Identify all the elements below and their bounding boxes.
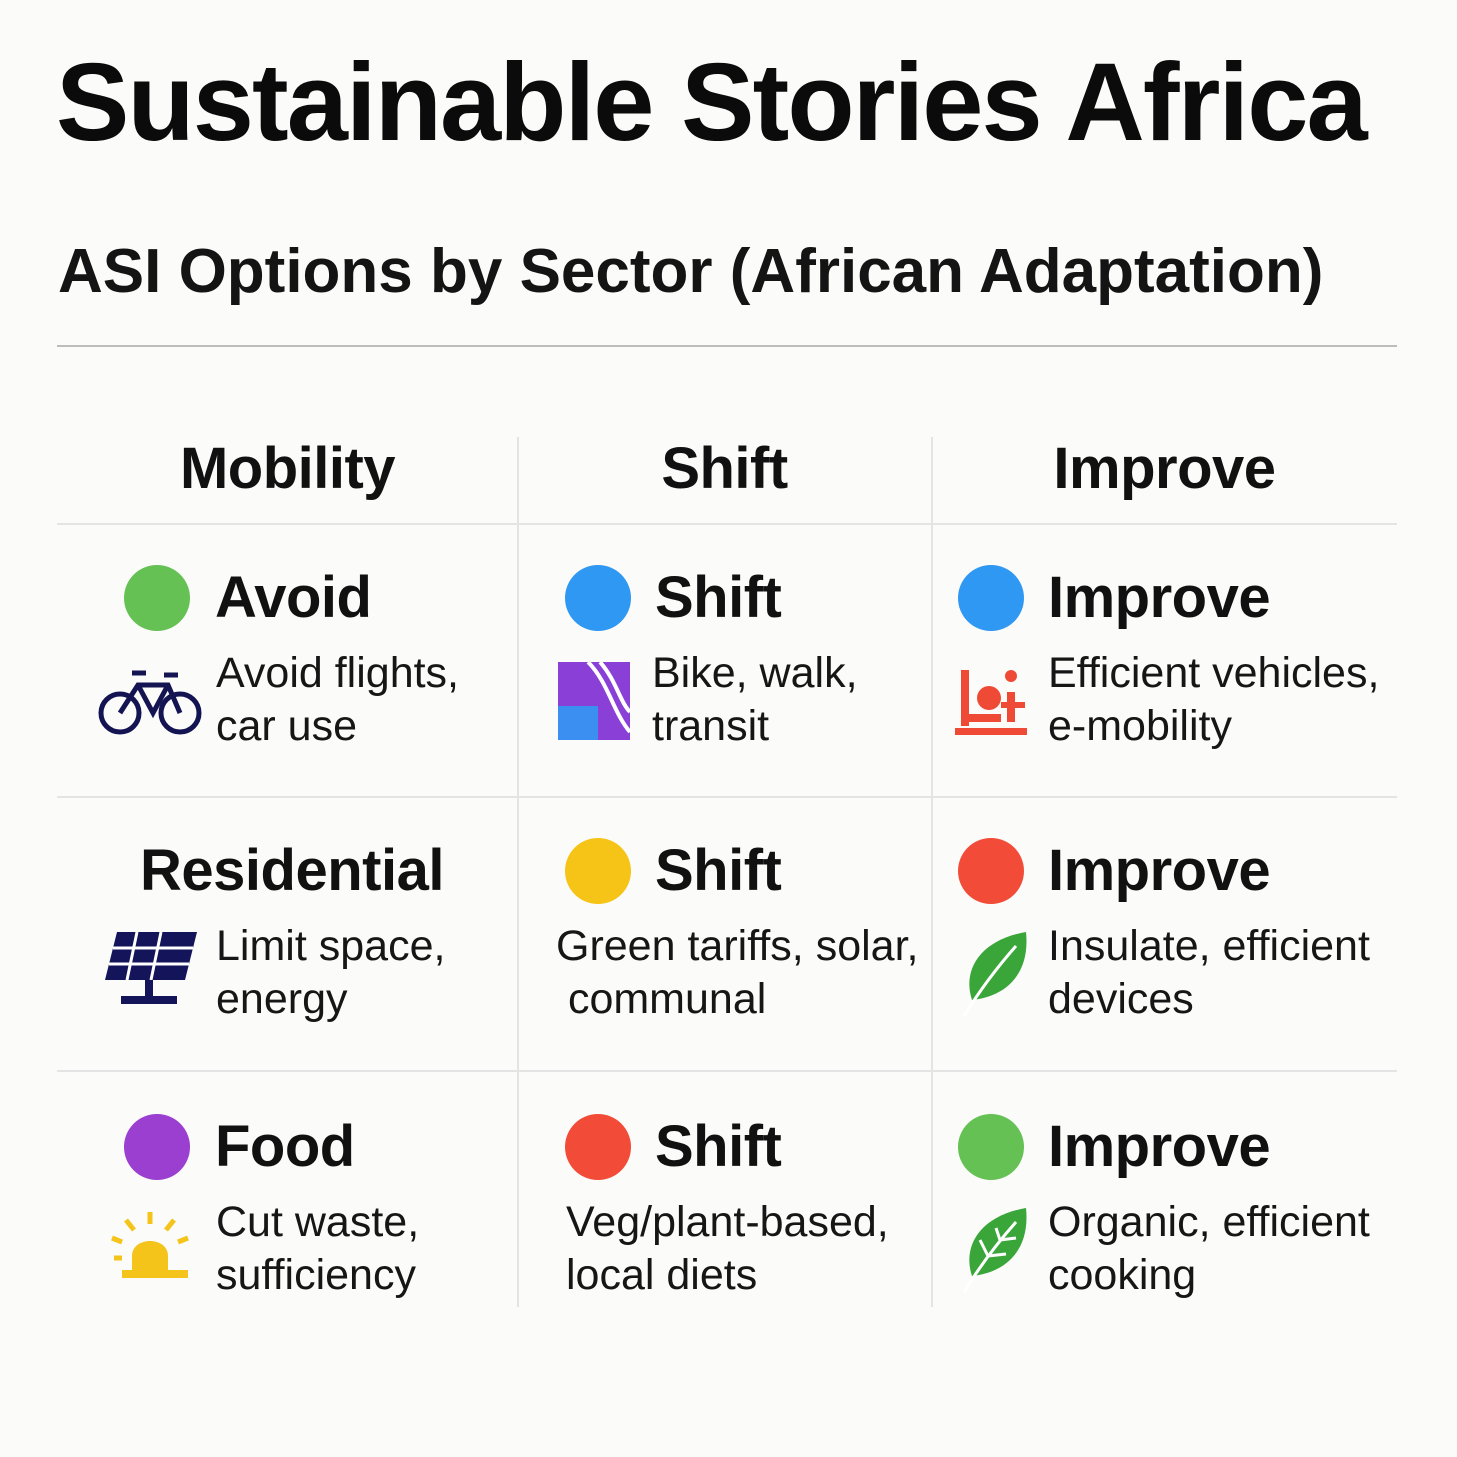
cell: Improve insulate: Insulate, efficient (1048, 922, 1370, 970)
cell: Food (111, 1114, 419, 1299)
cell: Improve cooking: Organic, efficient (1048, 1198, 1370, 1246)
cell: Food: Cut waste, (216, 1198, 419, 1246)
cell: Avoid: Avoid flights, (216, 649, 459, 697)
cell: Residential (105, 838, 445, 1023)
cell: Improve vehicles: e-mobility (1048, 702, 1232, 750)
cell: Shift bike: Bike, walk, (652, 649, 858, 697)
cell: Residential: energy (216, 975, 347, 1023)
cell: Improve vehicles: Improve (1048, 565, 1270, 630)
cell: Shift tariffs (556, 838, 918, 1023)
cell: Shift tariffs: communal (568, 975, 766, 1023)
cell: Residential: Residential (140, 838, 444, 903)
cell: Avoid: car use (216, 702, 357, 750)
title: Sustainable Stories Africa (56, 41, 1366, 164)
cell: Improve cooking: cooking (1048, 1251, 1196, 1299)
header: Mobility: Mobility (180, 436, 395, 501)
header: Improve: Improve (1053, 436, 1276, 501)
icon: leaf veined (969, 1208, 1026, 1276)
cell: Shift bike (558, 565, 858, 750)
cell: Improve vehicles: Efficient vehicles, (1048, 649, 1379, 697)
cell: Avoid (98, 565, 459, 750)
cell: Shift diets: Shift (655, 1114, 781, 1179)
cell: Shift diets: local diets (566, 1251, 757, 1299)
header: Shift: Shift (661, 436, 788, 501)
cell: Improve cooking: Improve (1048, 1114, 1270, 1179)
subtitle: ASI Options by Sector (African Adaptation) (58, 237, 1323, 306)
cell: Shift tariffs: Green tariffs, solar, (556, 922, 918, 970)
cell: Improve insulate: devices (1048, 975, 1194, 1023)
cell: Shift diets (565, 1114, 889, 1299)
cell: Food: sufficiency (216, 1251, 416, 1299)
icon: bicycle (98, 670, 202, 734)
cell: Improve insulate (958, 838, 1370, 1023)
icon: solar panel (105, 932, 197, 1004)
cell: Shift diets: Veg/plant-based, (566, 1198, 889, 1246)
cell: Improve cooking (958, 1114, 1370, 1299)
cell: Shift tariffs: Shift (655, 838, 781, 903)
cell: Shift bike: Shift (655, 565, 781, 630)
cell: Improve insulate: Improve (1048, 838, 1270, 903)
cell: Food: Food (215, 1114, 355, 1179)
cell: Improve vehicles (955, 565, 1379, 750)
icon: siren (111, 1212, 189, 1278)
icon: e-mobility (955, 670, 1027, 735)
icon: leaf (969, 932, 1026, 1000)
cell: Shift bike: transit (652, 702, 769, 750)
icon: transit (558, 662, 630, 740)
cell: Avoid: Avoid (215, 565, 371, 630)
cell: Residential: Limit space, (216, 922, 445, 970)
